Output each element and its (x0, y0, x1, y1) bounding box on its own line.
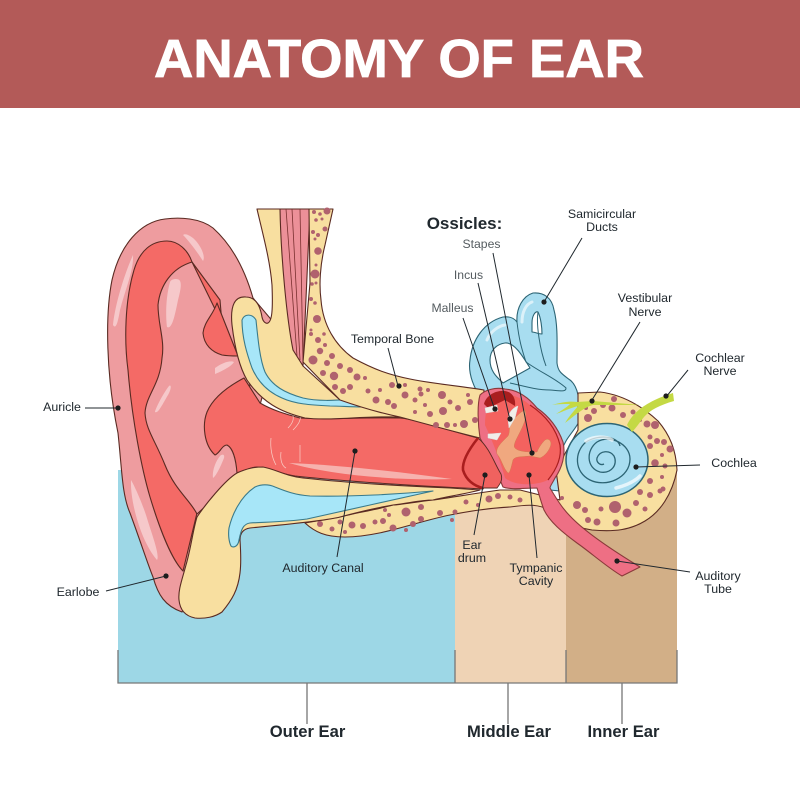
label: Outer Ear: Outer Ear (270, 722, 346, 741)
label: Samicircular Ducts: Ducts (586, 220, 618, 234)
lower canal skin blue (229, 485, 433, 547)
tragus red (203, 303, 238, 356)
label: Auditory Canal: Auditory Canal (282, 561, 364, 575)
label: Vestibular Nerve: Vestibular (618, 291, 672, 305)
header banner (0, 0, 800, 108)
label: Tympanic Cavity: Tympanic (509, 561, 563, 575)
cochlea spiral (577, 437, 630, 483)
label: Ear drum: Ear (462, 538, 482, 552)
title: ANATOMY OF EAR (154, 29, 644, 89)
label: Samicircular Ducts: Samicircular (568, 207, 636, 221)
leader dots (115, 299, 669, 579)
leader lines (85, 238, 700, 591)
label: Middle Ear: Middle Ear (467, 722, 551, 741)
concha (145, 262, 250, 514)
label: Tympanic Cavity: Cavity (519, 574, 554, 588)
label: Incus: Incus (454, 268, 483, 282)
label: Temporal Bone: Temporal Bone (351, 332, 434, 346)
label: Ear drum: drum (458, 551, 486, 565)
auricle (108, 218, 280, 612)
temporal bone upper (303, 208, 484, 438)
label: Stapes: Stapes (463, 237, 500, 251)
eardrum (463, 438, 502, 488)
cavity dark inner line (530, 405, 560, 480)
upper canal skin blue (242, 315, 363, 407)
duct inner lines (510, 312, 566, 391)
muscle striped (280, 209, 310, 366)
semicircular ducts (470, 293, 580, 492)
auditory canal (204, 378, 495, 489)
ossicles bones (485, 405, 551, 473)
upper bone pores (308, 208, 478, 428)
cochlea (566, 424, 648, 496)
lower cartilage (179, 467, 480, 618)
label: Earlobe: Earlobe (57, 585, 99, 599)
middle ear cavity (463, 388, 640, 576)
label: Inner Ear: Inner Ear (588, 722, 660, 741)
auricle highlights (113, 234, 234, 560)
label: Ossicles heading: Ossicles: (427, 214, 502, 233)
ossicle highlights (485, 405, 518, 440)
canal hairs and highlight (271, 412, 301, 468)
upper cartilage and skull wall (232, 208, 484, 438)
bone pores (317, 396, 674, 534)
label: Malleus: Malleus (432, 301, 474, 315)
tympanic cavity red (485, 394, 560, 484)
cochlear nerve (627, 393, 674, 432)
label: Auditory Tube: Auditory (695, 569, 742, 583)
vestibular and cochlear nerves (552, 393, 674, 432)
panel: outer ear background (118, 470, 455, 683)
label: Cochlear Nerve: Cochlear (695, 351, 745, 365)
malleus dark chamber (484, 391, 515, 408)
panel: inner ear background (566, 470, 677, 683)
label: Cochlear Nerve: Nerve (703, 364, 737, 378)
temporal bone, lower and inner ear part (305, 392, 677, 537)
label: Auditory Tube: Tube (704, 582, 732, 596)
label: Cochlea: Cochlea (711, 456, 757, 470)
inner helix band (126, 241, 230, 571)
label: Vestibular Nerve: Nerve (628, 305, 662, 319)
label: Auricle: Auricle (43, 400, 81, 414)
baseline bracket (118, 650, 677, 724)
panel: middle ear background (455, 500, 566, 683)
